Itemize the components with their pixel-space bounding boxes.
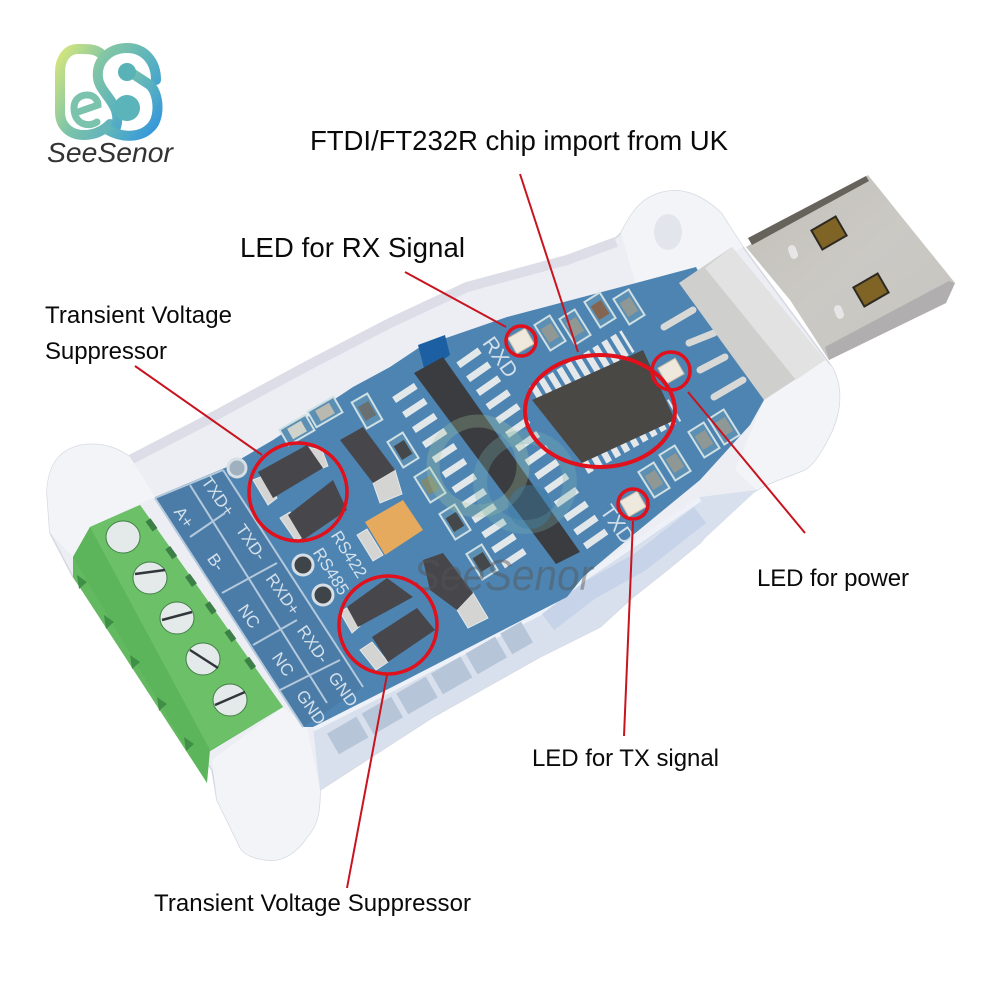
callout: LED for RX signal (240, 232, 536, 356)
through-hole pads (228, 459, 333, 605)
terminal labels: A+ (170, 503, 198, 532)
callout: Transient Voltage Suppressor upper: Transient Voltage (45, 302, 232, 329)
logo wordmark: SeeSenor (47, 137, 175, 168)
terminal labels: RS485 (309, 544, 353, 599)
diodes (253, 427, 488, 670)
dark copper spot (418, 335, 450, 372)
small smd part bodies (287, 297, 733, 572)
logo mark (60, 48, 158, 136)
status leds (508, 328, 684, 517)
callout: LED for power (652, 352, 909, 592)
lower case rail (313, 490, 757, 790)
small smd parts outlines (280, 290, 740, 579)
callout: Transient Voltage Suppressor lower (154, 576, 471, 917)
callout: LED for TX signal: LED for TX signal (532, 745, 719, 772)
callout: Transient Voltage Suppressor upper: Suppressor (45, 338, 167, 365)
terminal labels: TXD- (232, 521, 270, 564)
case top rim band (130, 242, 616, 460)
diode bodies (258, 427, 473, 662)
terminal labels: TXD+ (197, 473, 238, 520)
callout: Transient Voltage Suppressor lower: Transient Voltage Suppressor (154, 890, 471, 917)
callout: Transient Voltage Suppressor upper (45, 302, 347, 541)
terminal labels (170, 333, 638, 728)
usb contact windows (787, 216, 889, 320)
terminal labels: B- (203, 550, 228, 575)
case post (654, 214, 682, 250)
terminal labels: RS422 (327, 527, 371, 582)
callout: FTDI chip (310, 125, 729, 467)
watermark: SeeSenor (413, 551, 595, 600)
ftdi chip (532, 341, 675, 463)
terminal labels: NC (268, 649, 298, 680)
terminal labels: RXD- (293, 622, 333, 667)
case lobes (47, 191, 840, 860)
terminal labels: GND (292, 686, 329, 728)
transceiver chip (403, 355, 602, 564)
terminal labels: RXD+ (262, 570, 304, 619)
transparent case (47, 191, 840, 860)
terminal edge notches (148, 520, 262, 680)
terminal labels: TXD (595, 501, 638, 548)
callout: LED for power: LED for power (757, 565, 909, 592)
usb adapter device (47, 175, 955, 860)
terminal labels: RXD (478, 333, 522, 382)
pcb board (155, 247, 825, 728)
usb plug metal (746, 175, 955, 360)
tantalum capacitor (365, 500, 423, 555)
diode pads (253, 447, 488, 670)
terminal screws (106, 521, 247, 716)
logo: SeeSenor (47, 48, 175, 168)
usb leads (664, 310, 743, 397)
callout: LED for TX signal (532, 489, 719, 772)
terminal labels: GND (324, 668, 361, 710)
terminal labels: NC (234, 601, 264, 632)
usb metal collar (679, 247, 825, 400)
terminal label area (155, 470, 363, 727)
callout: FTDI chip: FTDI/FT232R chip import from UK (310, 125, 729, 156)
callout: LED for RX signal: LED for RX Signal (240, 232, 465, 263)
terminal label grid (155, 470, 363, 727)
watermark (413, 421, 595, 600)
green screw terminal (73, 505, 283, 783)
